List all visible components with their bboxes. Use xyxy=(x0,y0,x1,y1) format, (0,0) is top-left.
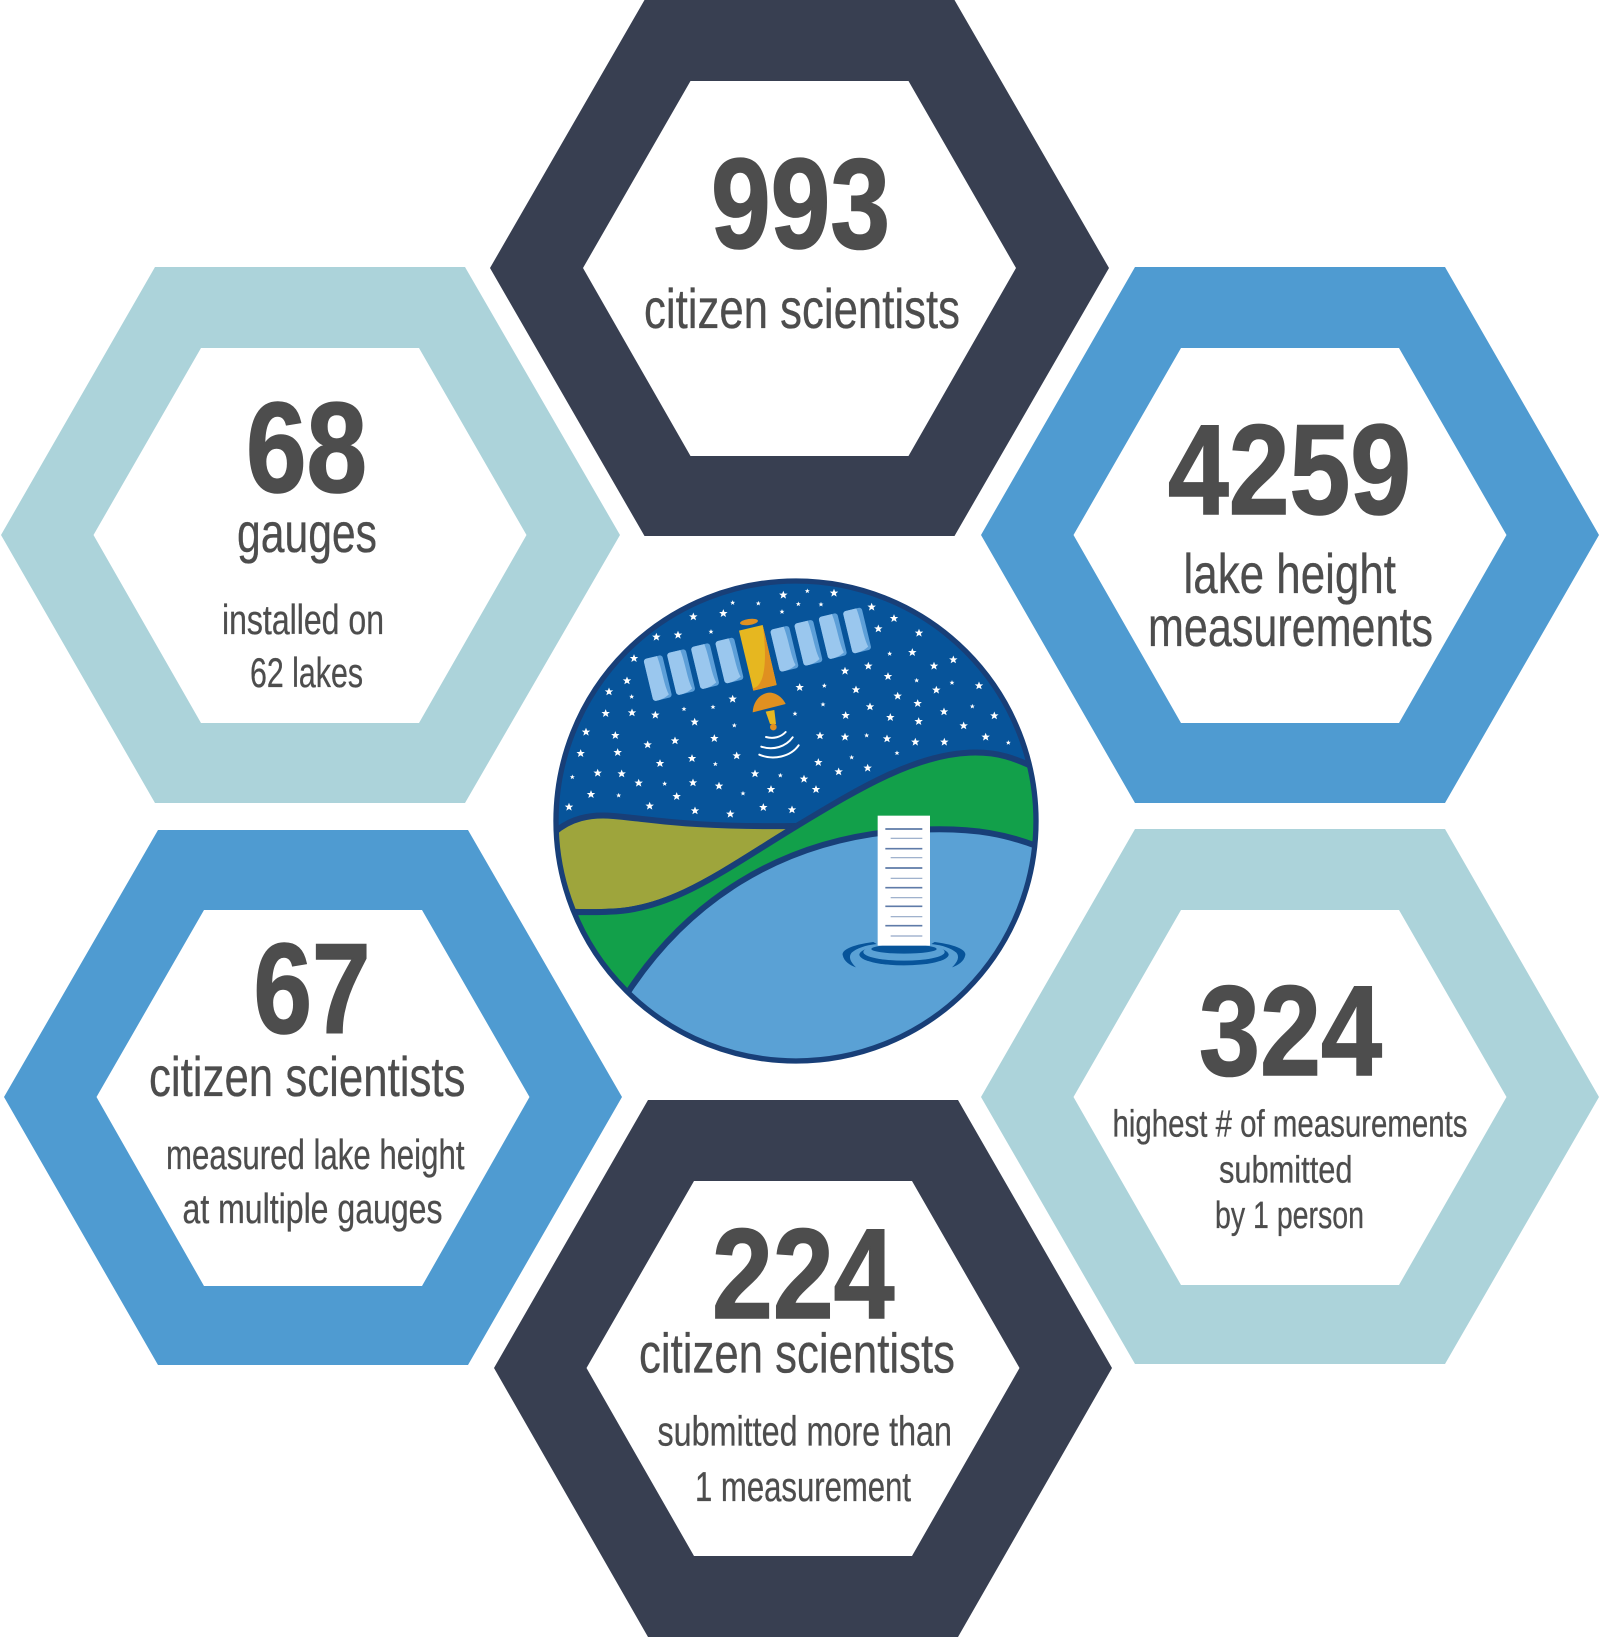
panel: 68 gauges xyxy=(1,267,620,803)
gauge staff xyxy=(878,816,930,946)
dark navy hexagon ring xyxy=(494,1100,1112,1637)
label lake height measurements: lake height xyxy=(1184,542,1396,605)
stars xyxy=(565,589,1011,818)
label citizen scientists: citizen scientists xyxy=(639,1322,955,1384)
panel: 324 highest number of measurements xyxy=(981,829,1599,1364)
emblem: satellite over lake and gauge xyxy=(553,578,1039,1064)
note measured lake height at multiple gauges: measured lake height xyxy=(166,1131,465,1178)
note installed on 62 lakes: 62 lakes xyxy=(250,649,363,696)
note installed on 62 lakes: installed on xyxy=(222,596,384,643)
number 324: 324 xyxy=(1199,960,1382,1103)
light teal hexagon ring xyxy=(1,267,620,803)
blue hexagon ring xyxy=(4,830,622,1365)
panel: 993 citizen scientists xyxy=(490,0,1109,536)
satellite body xyxy=(739,618,786,730)
icon: water level gauge xyxy=(843,816,965,967)
note submitted more than 1 measurement xyxy=(658,1408,952,1510)
gauge ripples xyxy=(843,942,965,967)
panel: 4259 lake height measurements xyxy=(981,267,1599,803)
light teal hexagon ring xyxy=(981,829,1599,1364)
note highest number of measurements submitted by 1 person: submitted xyxy=(1219,1150,1352,1192)
note submitted more than 1 measurement: 1 measurement xyxy=(695,1463,911,1510)
note highest number of measurements submitted by 1 person xyxy=(1112,1104,1468,1237)
number 993: 993 xyxy=(711,133,890,276)
lake xyxy=(627,826,1032,1058)
note highest number of measurements submitted by 1 person: by 1 person xyxy=(1215,1195,1364,1237)
night sky xyxy=(558,584,1026,826)
number 67: 67 xyxy=(254,918,370,1061)
note measured lake height at multiple gauges: at multiple gauges xyxy=(182,1185,442,1232)
blue hexagon ring xyxy=(981,267,1599,803)
panel: 67 citizen scientists xyxy=(4,830,622,1365)
green hill xyxy=(576,750,1034,988)
number 224: 224 xyxy=(712,1203,894,1346)
gauge markings xyxy=(885,829,922,936)
dark navy hexagon ring xyxy=(490,0,1109,536)
signal waves xyxy=(759,732,799,757)
icon: satellite xyxy=(643,607,872,757)
number 4259: 4259 xyxy=(1168,399,1411,542)
left solar wing xyxy=(643,637,744,701)
note highest number of measurements submitted by 1 person: highest # of measurements xyxy=(1112,1104,1468,1146)
emblem outline xyxy=(556,581,1036,1061)
note submitted more than 1 measurement: submitted more than xyxy=(658,1408,952,1454)
panel: 224 citizen scientists xyxy=(494,1100,1112,1637)
label citizen scientists: citizen scientists xyxy=(149,1045,466,1108)
right solar wing xyxy=(770,607,872,672)
note measured lake height at multiple gauges xyxy=(166,1131,465,1232)
label lake height measurements: measurements xyxy=(1148,595,1433,658)
number 68: 68 xyxy=(246,377,367,520)
label gauges: gauges xyxy=(237,501,377,564)
label lake height measurements xyxy=(1148,542,1433,658)
note installed on 62 lakes xyxy=(222,596,384,696)
label citizen scientists: citizen scientists xyxy=(644,277,960,340)
olive hill xyxy=(553,816,797,912)
